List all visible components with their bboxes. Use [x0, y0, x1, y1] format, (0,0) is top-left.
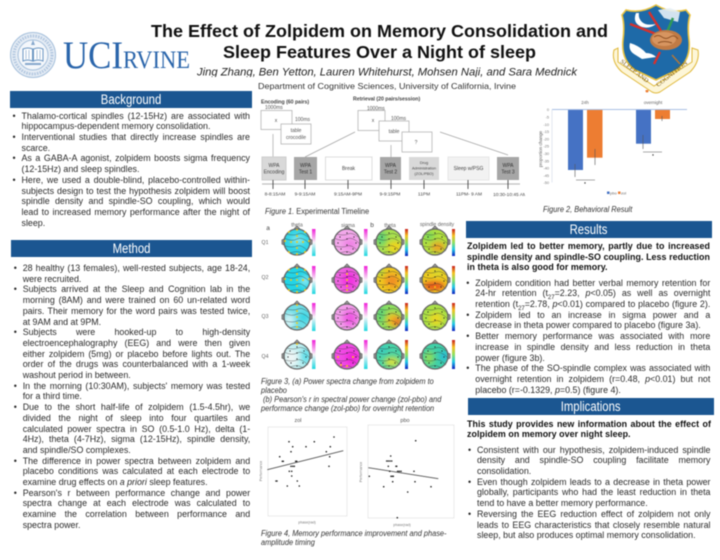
figure 1: experimental timeline: Test 2 [384, 170, 397, 176]
figure 2: behavioral result bar chart: pbo [610, 190, 617, 196]
caption: figure 4: amplitude timing [261, 538, 315, 546]
figure 2: behavioral result bar chart: -40 [544, 167, 549, 171]
figure 3: topographic maps: theta [291, 222, 303, 228]
text block: implications summary: This study provides new information about the effect of [467, 419, 711, 429]
figure 1: experimental timeline: WPA [268, 163, 280, 169]
figure 2: behavioral result bar chart: 0 [547, 108, 549, 112]
text block: results summary [466, 241, 710, 273]
figure 1: experimental timeline: table [389, 129, 400, 135]
figure 4: pbo scatter plot [359, 418, 454, 528]
caption: figure 3: Figure 3, (a) Power spectra change from zolpidem to [261, 376, 434, 386]
theta correlation column [374, 226, 404, 369]
figure 4: zol scatter plot: zol [294, 418, 302, 424]
text block: method bullets: pairs. Their memory for the word pairs was tested twice, [23, 306, 250, 316]
figure 1: experimental timeline: Encoding [264, 170, 285, 176]
theta power column [282, 226, 312, 369]
colorbars [312, 229, 455, 369]
figure 2: behavioral result bar chart: -10 [544, 123, 549, 127]
heading: background [10, 91, 252, 108]
department affiliation: Department of Cognitive Sciences, University of California, Irvine [258, 81, 516, 91]
figure 1: experimental timeline: 100ms [391, 116, 407, 122]
text block: results bullets: decrease in theta power compared to placebo (figure 3a). [475, 320, 701, 330]
figure 2: behavioral result bar chart: -25 [544, 145, 549, 149]
text block: method bullets: placebo conditions was calculated at each electrode to [23, 466, 250, 476]
caption: figure 3 [260, 376, 442, 414]
heading: results [466, 221, 712, 238]
text block: background bullets: (12-15Hz) and sleep spindles. [22, 164, 139, 174]
text block: method bullets: examine drug effects on a priori sleep features. [23, 477, 208, 487]
figure 1: experimental timeline: Encoding (60 pairs) [261, 100, 309, 106]
text block: background bullets: spindle density and spindle-SO coupling, which would [22, 196, 250, 206]
caption: figure 3: (b) Pearson's r in spectral power change (zol-pbo) and [263, 394, 441, 404]
text block: method bullets: Subjects were hooked-up to high-density [23, 327, 250, 337]
text block: method bullets: were recruited. [23, 274, 81, 284]
text block: method bullets: for a third time. [23, 391, 82, 401]
figure 1: experimental timeline: 100ms [295, 117, 311, 123]
figure 4: pbo scatter plot: pbo [400, 418, 410, 424]
figure 4: zol scatter plot: Performance [259, 461, 263, 481]
figure 1: experimental timeline: Retrieval (20 pairs/session) [353, 96, 420, 102]
text block: method bullets: either zolpidem (5mg) or placebo before lights out. The [23, 349, 250, 359]
panel: method [10, 239, 253, 530]
panel: results [465, 220, 713, 396]
figure 1: experimental timeline: WPA [300, 163, 312, 169]
text block: results bullets: Zolpidem condition had better verbal memory retention for [475, 278, 710, 288]
heading: implications [468, 398, 714, 415]
text block: results summary: in theta is also good for memory. [467, 262, 608, 272]
figure 1: experimental timeline: Sleep w/PSG [454, 166, 483, 172]
text block: implications bullets [468, 445, 711, 541]
figure 2: behavioral result bar chart: -30 [544, 152, 549, 156]
text block: implications summary: zolpidem on memory over night sleep. [467, 429, 631, 439]
figure 3: topographic maps: Q1 [262, 240, 269, 246]
text block: method bullets: 4Hz), theta (4-7Hz), sigma (12-15Hz), spindle density, [23, 434, 250, 444]
figure 2: behavioral result bar chart: -35 [544, 159, 549, 163]
text block: implications bullets: Consistent with our hypothesis, zolpidem-induced spindle [477, 445, 710, 455]
text block: method bullets: The difference in power spectra between zolpidem and [23, 456, 250, 466]
text block: method bullets: Due to the short half-life of zolpidem (1.5-4.5hr), we [23, 402, 250, 412]
figure 1: experimental timeline: 8-8:15AM [265, 192, 285, 198]
figure 1: experimental timeline: table [291, 128, 302, 134]
figure 2: behavioral result bar chart: -5 [546, 116, 549, 120]
figure 2: behavioral result bar chart: -50 [544, 181, 549, 185]
figure 1: experimental timeline: WPA [502, 163, 514, 169]
figure 3: topographic maps: spindle density [420, 222, 455, 228]
logo: sleep and cognition shield: SLEEP AND [619, 59, 650, 85]
text block: background bullets: Here, we used a double-blind, placebo-controlled within- [22, 175, 250, 185]
heading: results: Results [570, 222, 608, 237]
text block: results summary: Zolpidem led to better memory, partly due to increased [467, 241, 710, 251]
figure 1: experimental timeline: 9-9:15AM [295, 192, 315, 198]
text block: method bullets [13, 263, 251, 530]
figure 1: experimental timeline: x [372, 118, 375, 124]
text block: results bullets: power (figure 3b). [475, 353, 545, 363]
text block: results bullets: placebo (r=-0.1329, p=0.5) (figure 4). [475, 385, 621, 395]
text block: implications bullets: density and spindle-SO coupling facilitate memory [477, 455, 710, 465]
text block: method bullets: spectra power. [23, 520, 80, 530]
text block: results bullets: retention (t27=2.78, p<0.01) compared to placebo (figure 2). [475, 299, 710, 312]
spindle density correlation column [420, 226, 450, 369]
logo: sleep and cognition shield [612, 4, 700, 94]
figure 1: experimental timeline: 1000ms [367, 106, 385, 112]
text block: method bullets: morning (8AM) and were trained on 60 un-related word [23, 295, 250, 305]
text block: method bullets: 28 healthy (13 females), well-rested subjects, age 18-24, [23, 263, 250, 273]
figure 1: experimental timeline: Break [342, 166, 356, 172]
figure 2: behavioral result bar chart [538, 89, 688, 196]
title: The Effect of Zolpidem on Memory Consolidation and [151, 21, 608, 41]
figure 3: topographic maps: a [266, 225, 270, 232]
text block: results bullets: overnight retention in zolpidem (r=0.48, p<0.01) but not [475, 374, 710, 384]
figure 1: experimental timeline: x [275, 118, 278, 124]
text block: method bullets: divided the night of sleep into four quartiles and [23, 413, 250, 423]
text block: background bullets: lead to increased memory performance after the night of [22, 207, 250, 217]
logo: UCI Irvine wordmark [63, 36, 190, 72]
title: Sleep Features Over a Night of sleep [223, 42, 536, 62]
figure 1: experimental timeline: Test 3 [501, 170, 515, 176]
caption: figure 4 [260, 528, 447, 548]
figure 2: behavioral result bar chart: overnight [644, 100, 663, 105]
figure 2: behavioral result bar chart: -45 [544, 174, 549, 178]
text block: implications bullets: consolidation. [477, 466, 531, 476]
figure 1: experimental timeline: Drug [420, 161, 428, 165]
text block: method bullets: washout period in between. [23, 370, 131, 380]
text block: background bullets: As a GABA-A agonist, zolpidem boosts sigma frequency [22, 153, 250, 163]
text block: background bullets: Interventional studies that directly increase spindles are [22, 132, 250, 142]
text block: implications bullets: Even though zolpidem leads to a decrease in theta power [477, 477, 710, 487]
heading: method: Method [113, 241, 150, 256]
figure 1: experimental timeline: WPA [385, 163, 397, 169]
figure 1: experimental timeline: 1000ms [265, 105, 283, 111]
figure 3: topographic maps [261, 222, 456, 370]
figure 3: topographic maps: Q2 [262, 275, 269, 281]
panel: implications [466, 397, 715, 541]
text block: background bullets: hippocampus-dependent memory consolidation. [22, 121, 210, 131]
logo: sleep and cognition shield: COGNITION [656, 60, 690, 89]
figure 1: experimental timeline: crocodile [286, 135, 306, 141]
heading: implications: Implications [561, 399, 621, 414]
figure 2: behavioral result bar chart: -15 [544, 130, 549, 134]
figure 2: behavioral result bar chart: -20 [544, 137, 549, 141]
text block: method bullets: order of the drugs was counterbalanced with a 1-week [23, 359, 250, 369]
figure 3: topographic maps: theta [384, 223, 396, 229]
text block: method bullets: and spindle/SO complexes. [23, 445, 131, 455]
text block: method bullets: electroencephalography (EEG) and were then given [23, 338, 250, 348]
text block: implications summary [466, 419, 712, 440]
figure 4: zol scatter plot [259, 418, 348, 525]
figure 2: behavioral result bar chart: zol [621, 190, 626, 196]
text block: method bullets: calculated power spectra in SO (0.5-1.0 Hz), delta (1- [23, 424, 250, 434]
text block: implications bullets: globally, participants who had the least reduction in theta [477, 487, 710, 497]
figure 1: experimental timeline: 9-9:15PM [380, 192, 400, 198]
figure 1: experimental timeline: 11PM [418, 192, 430, 198]
text block: method bullets: Pearson's r between performance change and power [23, 488, 250, 498]
text block: implications bullets: Reversing the EEG reduction effect of zolpidem not only [477, 509, 710, 519]
text block: method bullets: In the morning (10:30AM), subjects' memory was tested [23, 381, 250, 391]
caption: figure 4: Figure 4, Memory performance improvement and phase- [261, 528, 446, 538]
figure 4: pbo scatter plot: phase(rad) [393, 523, 411, 527]
logo: UC seal [10, 32, 56, 78]
caption: figure 3: performance change (zol-pbo) for overnight retention [261, 404, 434, 412]
caption: figure 2: Figure 2, Behavioral Result [543, 204, 632, 214]
text block: implications bullets: sleep, but also produces optimal memory consolidation. [477, 530, 696, 540]
text block: results bullets: Zolpidem led to an increase in sigma power and a [475, 310, 710, 320]
sigma power column [332, 226, 362, 369]
figure 1: experimental timeline: (ZOL/PBO) [414, 172, 434, 176]
figure 4: zol scatter plot: phase(rad) [298, 520, 316, 524]
text block: background bullets: subjects design to test the hypothesis zolpidem will boost [22, 186, 250, 196]
text block: background bullets: Thalamo-cortical spindles (12-15Hz) are associated with [22, 111, 250, 121]
text block: implications bullets: tend to have a better memory performance. [477, 498, 648, 508]
figure 1: experimental timeline: Test 1 [299, 170, 312, 176]
figure 1: experimental timeline: ? [415, 140, 418, 146]
text block: method bullets: examine the correlation between performance and [23, 509, 250, 519]
text block: background bullets: scarce. [22, 143, 50, 153]
text block: method bullets: spectra change at each electrode was calculated to [23, 498, 250, 508]
text block: results bullets [466, 278, 711, 396]
figure 1: experimental timeline: 9:15AM-9PM [334, 192, 362, 198]
text block: background bullets: sleep. [22, 218, 45, 228]
title [150, 21, 608, 62]
figure 3: topographic maps: Q3 [262, 314, 269, 320]
figure 1: experimental timeline: 11PM- 9 AM [456, 192, 482, 198]
panel: background [9, 90, 253, 228]
heading: method [11, 240, 252, 257]
figure 1: experimental timeline: Administration [412, 166, 436, 170]
figure 1: experimental timeline [260, 96, 526, 198]
caption: figure 3: placebo [261, 386, 287, 394]
text block: results bullets: Better memory performance was associated with more [475, 331, 710, 341]
text block: results bullets: The phase of the SO-spindle complex was associated with [475, 363, 710, 373]
text block: implications bullets: leads to EEG characteristics that closely resemble natural [477, 520, 710, 530]
text block: method bullets: at 9AM and at 9PM. [23, 317, 101, 327]
figure 2: behavioral result bar chart: 24h [581, 100, 589, 105]
text block: results bullets: increase in spindle density and less reduction in theta [475, 342, 710, 352]
text block: background bullets [12, 111, 250, 228]
figure 3: topographic maps: sigma [341, 223, 355, 229]
figure 3: topographic maps: Q4 [262, 354, 269, 360]
heading: background: Background [101, 92, 161, 107]
figure 3: topographic maps: b [370, 222, 374, 229]
figure 4: pbo scatter plot: Performance [359, 462, 363, 482]
text block: method bullets: Subjects arrived at the Sleep and Cognition lab in the [23, 284, 250, 294]
figure 2: behavioral result bar chart: proportion change [538, 130, 543, 167]
caption: figure 1: Figure 1. Experimental Timeline [265, 206, 369, 216]
text block: results summary: spindle density and spindle-SO coupling. Less reduction [467, 252, 710, 262]
text block: results bullets: 24-hr retention (t27=2.23, p<0.05) as well as overnight [475, 288, 710, 301]
